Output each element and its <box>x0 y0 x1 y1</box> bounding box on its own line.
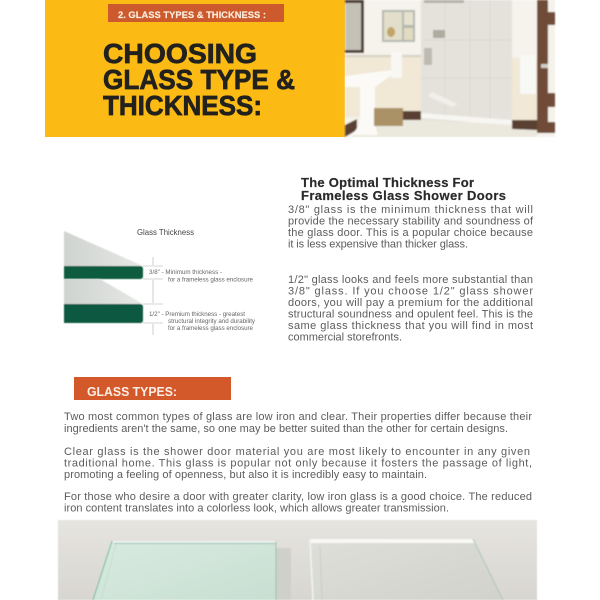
diagram: glass thickness <box>64 227 256 335</box>
subheading: optimal thickness <box>301 175 506 203</box>
wall art <box>382 10 415 42</box>
towels <box>391 52 402 78</box>
photo: bathroom with frameless shower door <box>345 0 555 137</box>
upper glass pane <box>64 231 143 279</box>
door <box>537 0 555 133</box>
text: 1/2 inch glass <box>288 274 533 344</box>
text: low iron glass <box>64 491 532 514</box>
main heading: THICKNESS: <box>103 90 262 121</box>
green-tinted clear glass pane <box>93 541 276 600</box>
text: clear glass: traditional home. This glass is popular not only because it fosters the passage of light, <box>64 458 532 470</box>
thickness labels: for a frameless glass enclosure <box>168 325 254 332</box>
thickness labels: 1/2" - Premium thickness - greatest <box>149 311 245 318</box>
basket <box>374 108 403 126</box>
section tag: 2. GLASS TYPES & THICKNESS : <box>118 10 266 21</box>
text: low iron glass: For those who desire a door with greater clarity, low iron glass is a good choice. The reduced <box>64 491 532 503</box>
section tag <box>108 4 284 22</box>
text: clear glass: promoting a feeling of openness, but also it is incredibly easy to maintain. <box>64 469 427 481</box>
thickness labels: for a frameless glass enclosure <box>168 276 254 284</box>
text: 1/2 inch glass: commercial storefronts. <box>288 332 402 344</box>
main heading: CHOOSING <box>103 38 257 69</box>
banner: glass types <box>74 377 231 400</box>
main heading <box>103 38 295 121</box>
text: clear glass <box>64 446 532 481</box>
text: 3/8 inch glass: the glass door. This is a popular choice because <box>288 227 533 239</box>
photo: clear and low iron glass samples <box>58 520 537 600</box>
shower enclosure <box>421 0 512 125</box>
main heading: GLASS TYPE & <box>103 64 295 95</box>
text: 1/2 inch glass: doors, you will pay a premium for the additional <box>288 297 533 309</box>
text: glass types intro <box>64 411 532 435</box>
diagram title: Glass Thickness <box>137 227 194 237</box>
lower glass pane <box>64 279 143 323</box>
low iron glass pane <box>310 539 503 600</box>
text: glass types intro: Two most common types of glass are low iron and clear. Their properties differ because their <box>64 411 532 423</box>
subheading: optimal thickness: The Optimal Thickness For <box>301 175 474 190</box>
text: low iron glass: iron content translates into a colorless look, which allows greater transmission. <box>64 502 449 514</box>
thickness labels <box>149 269 256 332</box>
mirror <box>345 0 364 53</box>
text: clear glass: Clear glass is the shower door material you are most likely to encounter in any given <box>64 446 530 458</box>
text: 3/8 inch glass <box>288 204 534 250</box>
subheading: optimal thickness: Frameless Glass Shower Doors <box>301 188 506 203</box>
text: 3/8 inch glass: provide the necessary stability and soundness of <box>288 216 534 228</box>
pedestal sink <box>345 70 392 135</box>
text: 1/2 inch glass: 3/8" glass. If you choose 1/2" glass shower <box>288 286 533 298</box>
thickness labels: 3/8" - Minimum thickness - <box>149 269 222 276</box>
text: glass types intro: ingredients aren't the same, so one may be better suited than the other for certain designs. <box>64 423 508 435</box>
text: 3/8 inch glass: 3/8" glass is the minimum thickness that will <box>288 204 533 216</box>
text: 3/8 inch glass: it is less expensive than thicker glass. <box>288 238 468 250</box>
panel: yellow header <box>45 0 345 137</box>
text: 1/2 inch glass: 1/2" glass looks and feels more substantial than <box>288 274 533 286</box>
floor <box>352 120 537 137</box>
text: 1/2 inch glass: structural soundness and opulent feel. This is the <box>288 308 533 320</box>
text: 1/2 inch glass: same glass thickness that you will find in most <box>288 320 533 332</box>
thickness labels: structural integrity and durability <box>168 318 256 325</box>
banner: glass types: GLASS TYPES: <box>87 384 177 399</box>
baseboards <box>345 111 537 137</box>
